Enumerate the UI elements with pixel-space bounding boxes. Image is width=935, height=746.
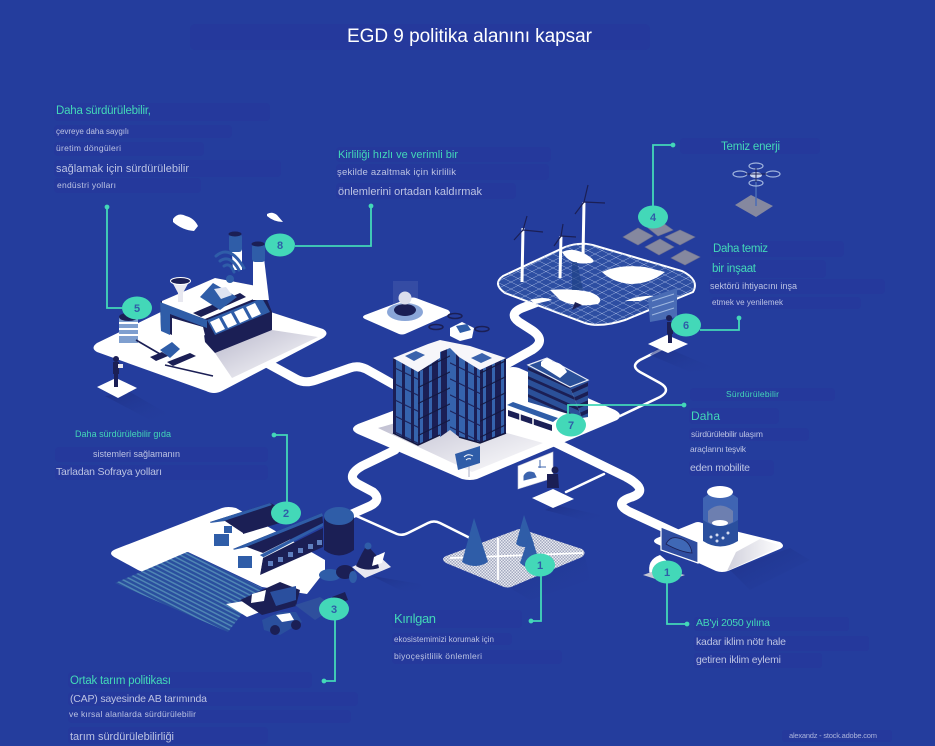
icon: cloud board: [661, 527, 698, 563]
icon: barns: [210, 503, 323, 575]
callout line: 1 forest: [530, 575, 541, 622]
number badge 1 climate: 1: [664, 567, 670, 579]
callout line: 5: [106, 206, 122, 308]
number badge 4: [638, 206, 668, 228]
icon: wifi sign: [455, 446, 480, 477]
icon: service drone: [429, 314, 489, 341]
callout line: 3: [322, 620, 335, 682]
icon: chimneys: [228, 232, 269, 300]
panel: factory platform: [94, 213, 326, 393]
text block: farm to fork: [56, 429, 180, 478]
text block: cleaner construction: etmek ve yenilemek: [712, 298, 784, 307]
icon: twin towers: [393, 340, 506, 445]
callout line: 6: [700, 316, 740, 330]
text block: biodiversity: ekosistemimizi korumak için: [394, 635, 494, 644]
text block: zero pollution: şekilde azaltmak için kirlilik: [337, 167, 456, 178]
text block: cleaner construction: Daha temiz: [713, 243, 768, 255]
number badge 1 climate: [652, 560, 682, 584]
panel: presenter with whiteboard: [518, 452, 600, 522]
text block: sustainable mobility: Daha: [691, 409, 720, 423]
panel: data board person: [648, 288, 720, 372]
text block: common agricultural policy: ve kırsal alanlarda sürdürülebilir: [69, 709, 196, 719]
number badge 7: [556, 414, 586, 436]
text block: sustainable industry: sağlamak için sürdürülebilir: [56, 163, 189, 175]
callout line: 4: [653, 144, 674, 207]
icon: silo and conveyors: [119, 313, 213, 376]
panel: forest biodiversity: [443, 515, 590, 600]
icon: seated farmer with laptop: [352, 542, 425, 592]
text block: sustainable industry: üretim döngüleri: [56, 143, 121, 153]
text block: cleaner construction: bir inşaat: [712, 263, 757, 275]
text block: sustainable mobility: eden mobilite: [690, 462, 750, 474]
icon: server cylinder: [703, 486, 738, 546]
panel: wind farm island: [498, 185, 695, 325]
text block: zero pollution: önlemlerini ortadan kaldırmak: [338, 186, 482, 198]
number badge 7: 7: [568, 420, 574, 432]
panel: lamp platform: [363, 281, 489, 341]
text block: biodiversity: [394, 611, 494, 661]
text block: common agricultural policy: [69, 675, 207, 743]
panel: person on small platform: [97, 356, 170, 420]
icon: seated person: [643, 555, 685, 582]
number badge 8: 8: [277, 240, 283, 252]
icon: clouds: [173, 213, 283, 231]
text block: zero pollution: [337, 149, 482, 198]
icon: bus: [507, 402, 558, 437]
icon: solar drone: [733, 163, 780, 217]
callout line: 2: [272, 434, 287, 503]
text block: sustainable mobility: araçlarını teşvik: [690, 444, 747, 454]
text block: farm to fork: Daha sürdürülebilir gıda: [75, 429, 171, 439]
text block: clean energy: Temiz enerji: [721, 141, 780, 153]
icon: harvester: [226, 582, 300, 617]
text block: farm to fork: Tarladan Sofraya yolları: [56, 466, 162, 478]
text block: common agricultural policy: Ortak tarım politikası: [70, 675, 171, 687]
text block: common agricultural policy: (CAP) sayesinde AB tarımında: [70, 693, 207, 705]
number badge 8: [265, 234, 295, 256]
callout line: 1 climate: [667, 582, 688, 626]
text block: sustainable mobility: sürdürülebilir ulaşım: [691, 429, 763, 439]
text block: biodiversity: biyoçeşitlilik önlemleri: [394, 651, 482, 661]
icon: grain silo: [324, 507, 354, 556]
number badge 3: 3: [331, 604, 337, 616]
text block: cleaner construction: [710, 243, 797, 307]
text block: climate action: [696, 617, 786, 666]
number badge 6: [671, 314, 701, 336]
text block: sustainable industry: endüstri yolları: [57, 180, 116, 190]
image credit: alexandz - stock.adobe.com: [789, 731, 877, 740]
number badge 5: [122, 296, 152, 320]
number badge 5: 5: [134, 303, 140, 315]
text block: sustainable industry: Daha sürdürülebilir,: [56, 105, 151, 117]
icon: tractor: [262, 612, 302, 635]
text block: climate action: getiren iklim eylemi: [696, 654, 781, 666]
panel: data center platform: [643, 486, 810, 590]
icon: crop field: [115, 552, 262, 632]
panel: farm: [111, 503, 425, 635]
text block: sustainable mobility: [690, 389, 779, 474]
icon: machinery: [295, 565, 357, 620]
text block: climate action: AB'yi 2050 yılına: [696, 617, 770, 629]
title: EGD 9 politika alanını kapsar: [347, 26, 593, 47]
text block: sustainable mobility: Sürdürülebilir: [726, 389, 779, 399]
number badge 2: 2: [283, 508, 289, 520]
number badge 2: [271, 502, 301, 524]
text block: zero pollution: Kirliliği hızlı ve verimli bir: [338, 149, 458, 161]
icon: wind turbines: [514, 185, 605, 282]
text block: biodiversity: Kırılgan: [394, 611, 436, 626]
icon: wifi: [216, 252, 244, 282]
roads: [265, 298, 695, 542]
text block: farm to fork: sistemleri sağlamanın: [93, 449, 180, 459]
text block: common agricultural policy: tarım sürdürülebilirliği: [70, 731, 174, 743]
number badge 1 forest: [525, 554, 555, 576]
number badge 6: 6: [683, 320, 689, 332]
icon: funnel: [170, 278, 190, 302]
text block: cleaner construction: sektörü ihtiyacını inşa: [710, 281, 797, 291]
callout line: 7: [568, 404, 686, 415]
number badge 1 forest: 1: [537, 560, 543, 572]
icon: cone trees: [462, 515, 540, 568]
icon: factory building: [160, 278, 272, 353]
number badge 4: 4: [650, 212, 657, 224]
callout line: 8: [295, 204, 372, 246]
panel: central platform: [353, 340, 620, 480]
icon: office building: [528, 358, 588, 418]
number badge 3: [319, 598, 349, 620]
text block: climate action: kadar iklim nötr hale: [696, 636, 786, 648]
text block: sustainable industry: [56, 105, 189, 190]
icon: solar panels: [623, 223, 700, 265]
text block: sustainable industry: çevreye daha saygılı: [56, 127, 129, 136]
